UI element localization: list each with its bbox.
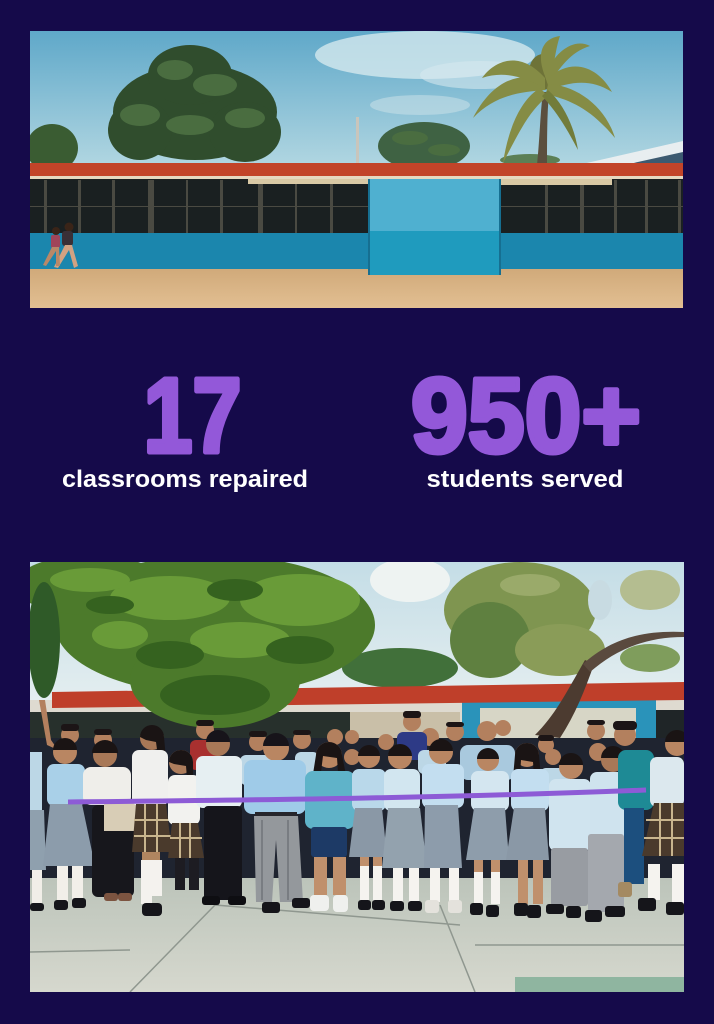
student: girl in plaid skirt xyxy=(132,725,172,916)
student: boy in white shirt and grey trousers xyxy=(585,746,625,922)
label: students served xyxy=(426,466,624,493)
building walls and windows xyxy=(30,178,683,275)
metal roof at right xyxy=(587,141,683,163)
purple ribbon xyxy=(68,790,646,802)
tree left canopy xyxy=(15,555,375,728)
pavement xyxy=(30,878,684,992)
number 17: 17 xyxy=(144,357,242,475)
teacher in teal top xyxy=(618,750,654,897)
student far left xyxy=(30,752,46,911)
number 950+: 950+ xyxy=(411,357,641,475)
student: boy in white shirt with black trousers xyxy=(196,730,246,905)
photo: school building exterior xyxy=(26,31,683,308)
student: boy in blue shirt with grey trousers xyxy=(244,733,310,913)
distant trees xyxy=(342,648,458,688)
back row of heads xyxy=(39,700,637,786)
student: girl in plaid skirt far right xyxy=(638,730,689,915)
sky with clouds xyxy=(30,31,683,171)
student: girl with grey skirt, centre xyxy=(382,744,427,911)
crowd dark backdrop xyxy=(30,738,684,878)
sky xyxy=(30,558,684,702)
pole xyxy=(356,117,359,164)
student: girl with long hair and grey skirt xyxy=(506,743,549,918)
photo: ribbon cutting with students xyxy=(15,555,689,992)
trees behind the building xyxy=(26,45,560,172)
teacher in white top xyxy=(83,740,136,901)
red roof edge xyxy=(30,163,683,176)
student: girl with grey skirt, right of centre xyxy=(466,748,509,917)
palm tree xyxy=(473,36,615,165)
stat: 17 classrooms repaired xyxy=(62,357,308,493)
student: girl in teal shirt with navy shorts xyxy=(305,742,355,912)
student: girl in blue shirt xyxy=(43,738,95,910)
student: girl with grey skirt xyxy=(349,745,387,910)
children running xyxy=(43,222,78,268)
building xyxy=(30,682,684,738)
sandy ground xyxy=(30,266,683,308)
student: taller girl with grey skirt xyxy=(422,739,464,913)
student: small girl in plaid skirt xyxy=(168,750,204,890)
tree right canopy and trunk xyxy=(444,562,684,738)
student: boy in grey trousers xyxy=(546,753,591,918)
label: classrooms repaired xyxy=(62,466,308,493)
stat: 950+ students served xyxy=(411,357,641,493)
